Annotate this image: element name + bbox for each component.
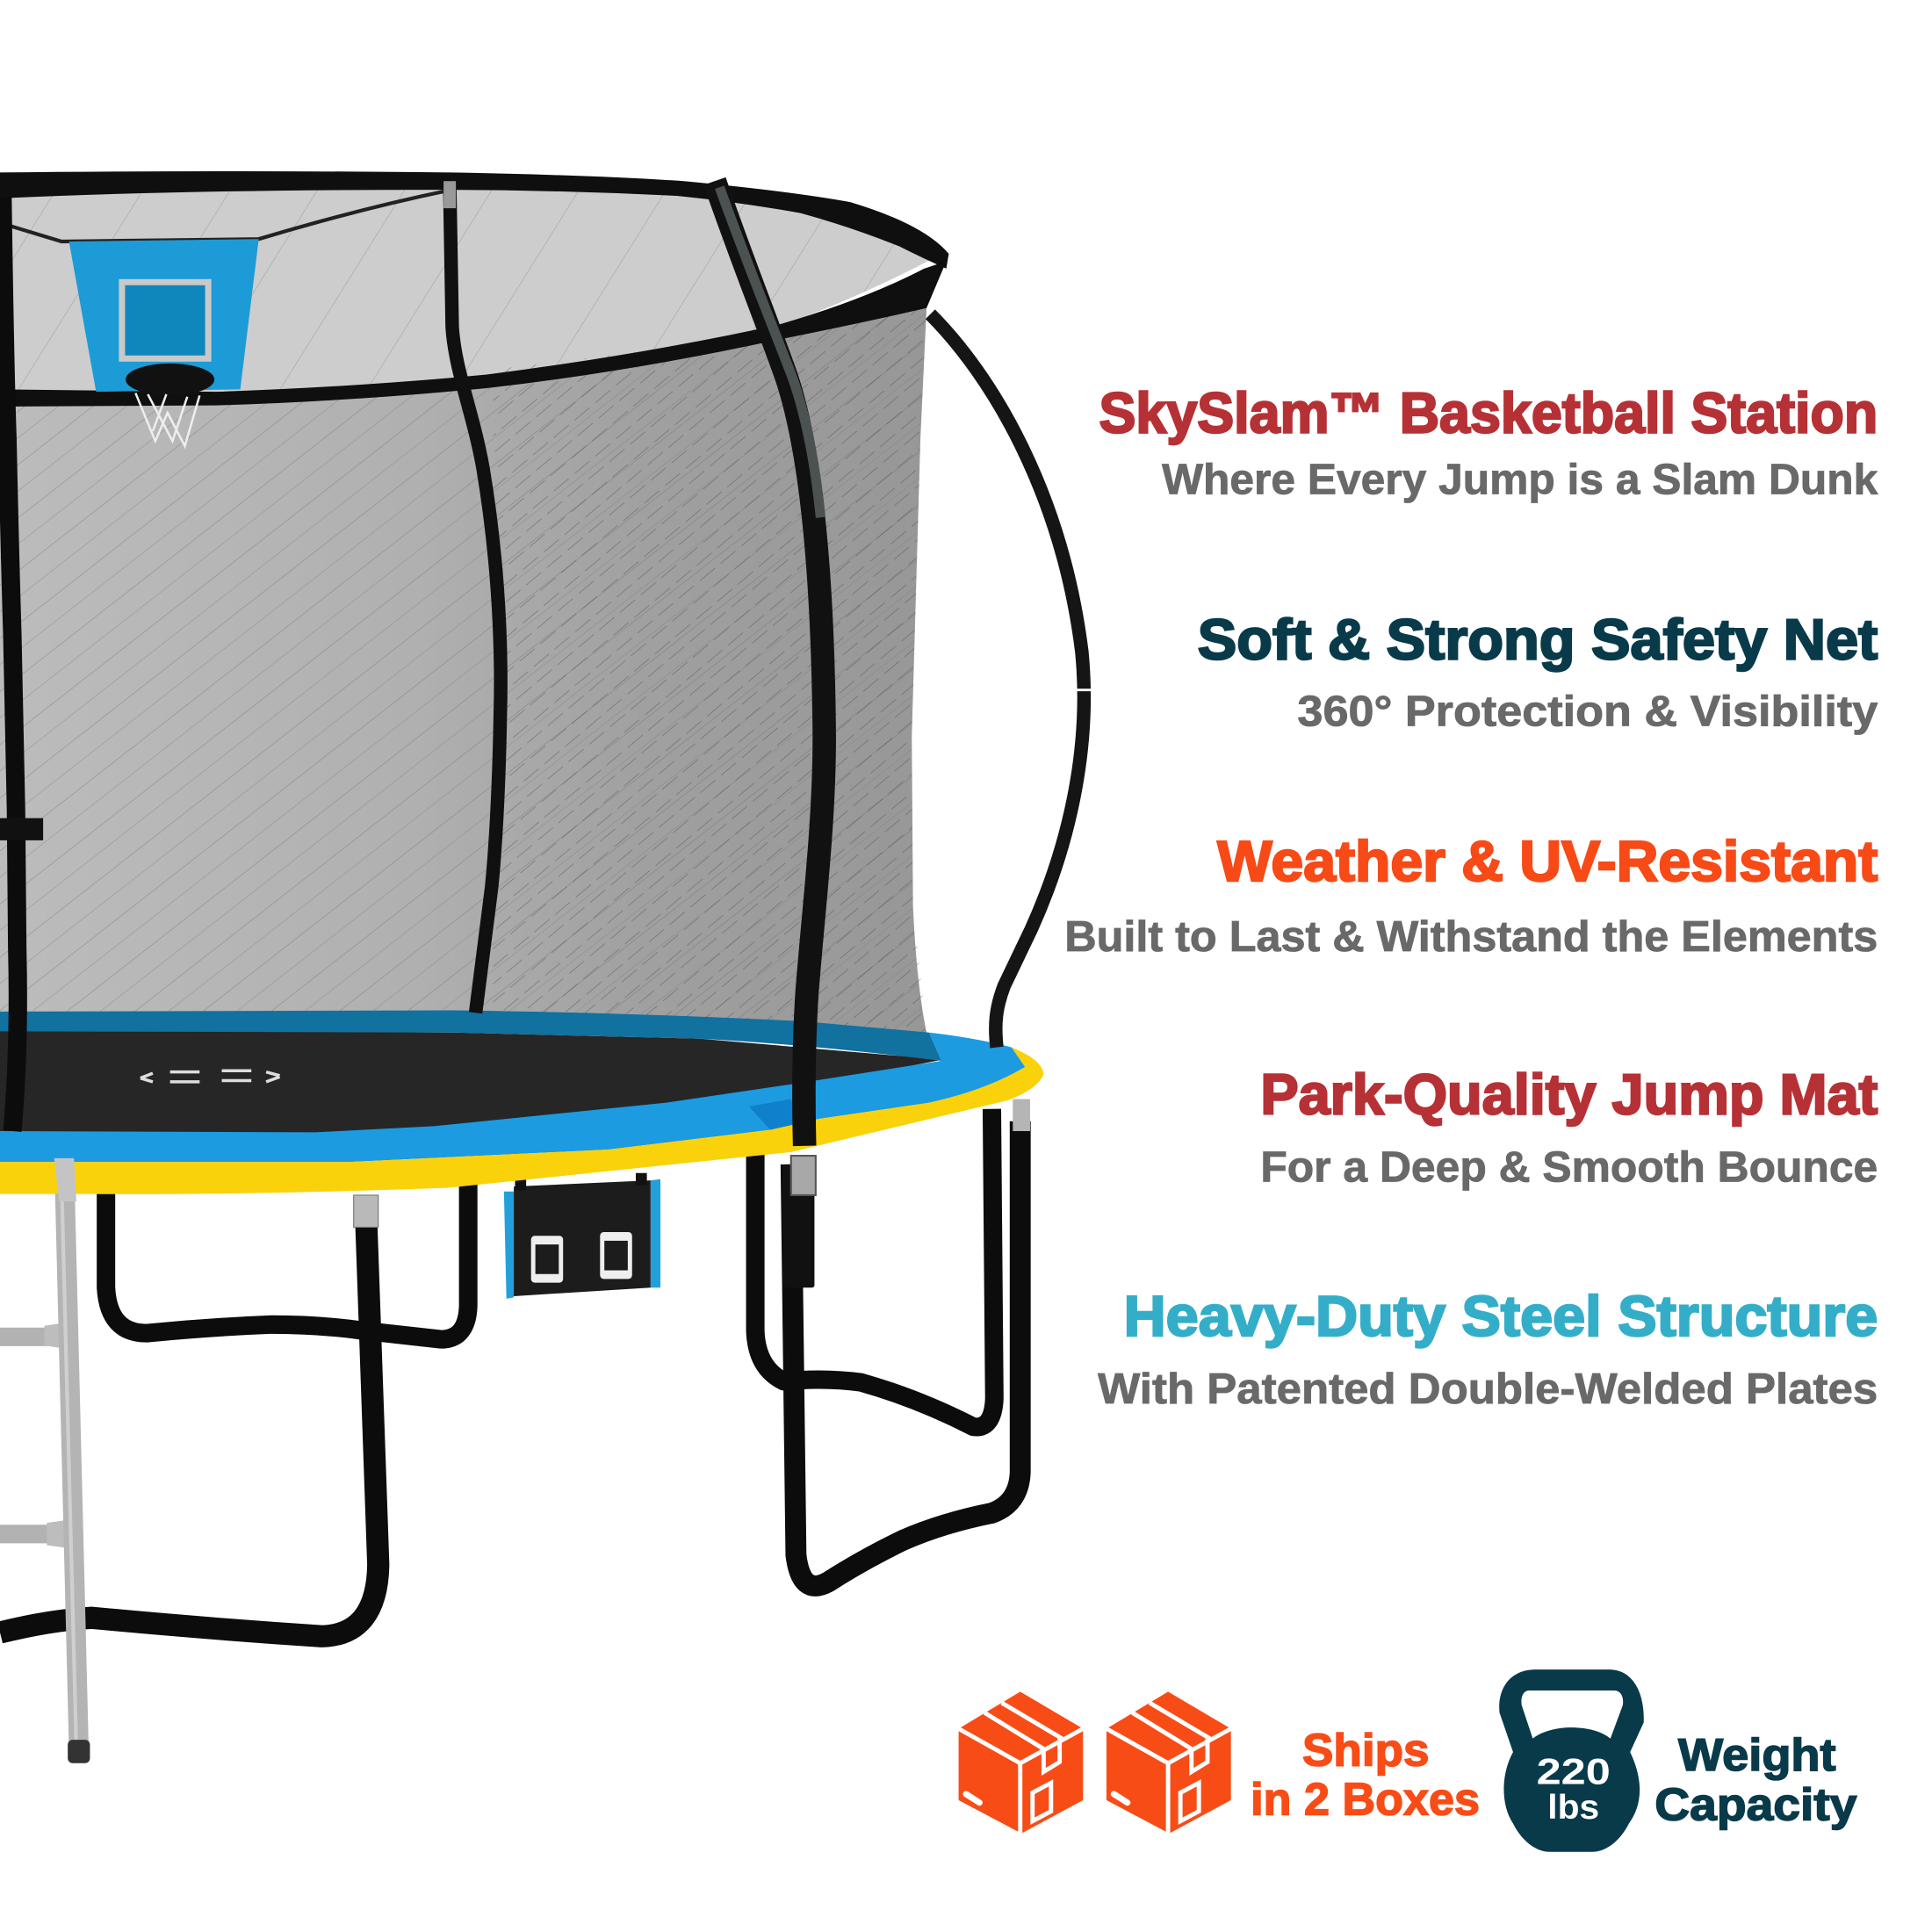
ladder top hook	[54, 1158, 76, 1201]
storage bag with phone pockets	[504, 1173, 660, 1299]
outer curved pole	[930, 314, 1084, 1048]
subheading: 360° Protection & Visibility	[1297, 688, 1878, 735]
pole left	[3, 197, 18, 1131]
label: weight capacity	[1654, 1730, 1857, 1830]
leg sleeve: centre	[791, 1156, 816, 1195]
subheading: For a Deep & Smooth Bounce	[1260, 1144, 1878, 1192]
feature: weather resistant	[1064, 830, 1878, 961]
heading: Park-Quality Jump Mat	[1260, 1063, 1878, 1126]
subheading: Where Every Jump is a Slam Dunk	[1162, 457, 1878, 504]
ladder	[0, 1158, 90, 1763]
pole foam highlight	[719, 187, 820, 517]
leg sleeve: left	[354, 1195, 378, 1227]
feature: basketball station	[1099, 381, 1878, 504]
backboard frame	[122, 282, 208, 358]
safety net: lower curtain	[0, 308, 936, 1035]
feature: steel structure	[1098, 1285, 1878, 1413]
jump mat	[0, 1030, 942, 1136]
pole middle	[450, 184, 501, 1013]
pole front right	[715, 181, 825, 1146]
back pad band	[0, 1011, 941, 1061]
front right leg	[791, 1121, 1020, 1586]
icon: kettlebell 220 lbs: 220	[1537, 1751, 1611, 1792]
pole left clamp	[0, 818, 43, 840]
leg sleeve: right	[1013, 1099, 1030, 1131]
heading: Weather & UV-Resistant	[1217, 830, 1878, 893]
subheading: With Patented Double-Welded Plates	[1098, 1366, 1878, 1413]
front pad: blue	[0, 1033, 1025, 1162]
lower ring	[0, 261, 947, 407]
icon: box 2	[1107, 1691, 1231, 1834]
pole middle cap	[443, 181, 456, 208]
heading: SkySlam™ Basketball Station	[1099, 381, 1878, 444]
back legs	[106, 1109, 994, 1427]
label: ships in 2 boxes: in 2 Boxes	[1251, 1775, 1480, 1826]
icon: box 1	[959, 1691, 1083, 1834]
hoop	[126, 364, 214, 395]
backboard panel	[69, 239, 259, 392]
top rim	[0, 171, 948, 269]
front left leg	[0, 1214, 378, 1636]
basketball station	[9, 191, 446, 446]
rope	[9, 191, 446, 242]
feature: jump mat	[1260, 1063, 1878, 1192]
icon: kettlebell 220 lbs: lbs	[1547, 1788, 1599, 1827]
hoop net	[135, 393, 199, 446]
label: weight capacity: Capacity	[1654, 1779, 1857, 1830]
pad shading streaks	[749, 1099, 801, 1131]
outer pole joint	[1074, 689, 1092, 691]
feature: safety net	[1198, 609, 1878, 735]
label: ships in 2 boxes	[1251, 1726, 1480, 1826]
trampoline illustration	[0, 171, 1092, 1763]
subheading: Built to Last & Withstand the Elements	[1064, 913, 1878, 961]
front pad: yellow	[0, 1048, 1043, 1194]
safety net: upper view through opening	[0, 186, 930, 394]
heading: Heavy-Duty Steel Structure	[1124, 1285, 1878, 1348]
label: weight capacity: Weight	[1678, 1730, 1836, 1781]
heading: Soft & Strong Safety Net	[1198, 609, 1878, 672]
label: ships in 2 boxes: Ships	[1302, 1726, 1430, 1777]
centre leg joint	[782, 1164, 814, 1287]
icon: kettlebell 220 lbs	[1499, 1669, 1644, 1852]
